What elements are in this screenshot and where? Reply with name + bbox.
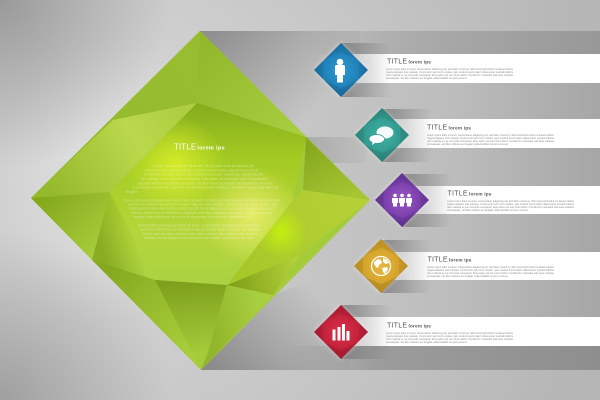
facet: bottom tip (155, 280, 208, 370)
text block: nisl ut aliquip ex ea commodo consequat. Duis autem vel eum iriure dolor in hendrerit in vulputate velit esse molestie (386, 73, 514, 77)
facet: centre (92, 103, 306, 285)
text block: nisl ut aliquip ex ea commodo consequat. Duis autem vel eum iriure dolor in hendrerit in vulputate velit esse molestie (447, 205, 575, 209)
glow: lower centre (92, 103, 306, 285)
text block: consequat, vel illum dolore eu feugiat nulla facilisis at vero eros et (386, 340, 467, 344)
icon: bar chart diamond (314, 305, 368, 359)
text block: magna aliquam erat volutpat. Ut wisi enim ad minim veniam, quis nostrud exerci tation ullamcorper suscipit lobortis (386, 334, 514, 338)
icon: speech bubbles diamond (355, 108, 409, 162)
text block: gem body: feugait (126, 190, 137, 194)
text block (447, 199, 575, 212)
text block: nisl ut aliquip ex ea commodo consequat. Duis autem vel eum iriure dolor in hendrerit in vulputate velit esse molestie (386, 337, 514, 341)
text block (427, 133, 555, 146)
facet: right lower (227, 255, 300, 295)
bar (406, 186, 600, 214)
text block: nisl ut aliquip ex ea commodo consequat. Duis autem vel eum iriure dolor in hendrerit in vulputate velit esse molestie (427, 139, 555, 143)
text block: gem body: nonummy nibh euismod tincidunt ut laoreet dolore magna aliquam erat volutpat (140, 228, 260, 232)
text block (427, 265, 555, 278)
text block: gem body: Ut wisi enim ad minim veniam, quis nostrud exerci tation ullamcorper suscipit lobortis (144, 173, 263, 177)
text block (386, 67, 514, 80)
text block (386, 331, 514, 344)
text block: gem body (124, 164, 280, 240)
text block: gem body: nostrud exerci tation ullamcorper suscipit lobortis nisl ut aliquip ex ea commodo consequat duis autem (129, 207, 275, 211)
text block: consequat, vel illum dolore eu feugiat nulla facilisis at vero eros et (447, 208, 528, 212)
facet: upper right (197, 31, 306, 137)
facet: bottom centre (155, 280, 227, 352)
title: TITLE lorem ips (427, 122, 471, 132)
panel: item 5 red (314, 305, 600, 359)
text block: gem body: feugiat nulla facilisis at vero eros et accumsan et iusto odio dignissim qui (133, 215, 250, 219)
facet: left (31, 192, 110, 260)
text block: gem body: vulputate velit esse molestie consequat, vel illum dolore eu feugiat nulla facilisis at vero eros (137, 181, 273, 185)
glow: right (227, 190, 370, 285)
text block: gem body: Lorem ipsum dolor sit amet, ut ut justo duis psuscipit sit (153, 164, 253, 168)
text block: nisl ut aliquip ex ea commodo consequat. Duis autem vel eum iriure dolor in hendrerit in vulputate velit esse molestie (427, 271, 555, 275)
text block: gem body: Ut wisi enim ad minim veniam, quis nostrud exerci tation ullamcorper suscipit (142, 232, 257, 236)
text block: gem body: nonummy nibh euismod tincidunt ut laoreet dolore magna aliquam erat et vis at (145, 168, 258, 172)
panel: item 3 purple (375, 173, 600, 227)
text block: gem body: lobortis nisl ut aliquip ex ea commodo consequat. Duis autem vel eum (144, 236, 253, 240)
text block: magna aliquam erat volutpat. Ut wisi enim ad minim veniam, quis nostrud exerci tation ullamcorper suscipit lobortis (427, 268, 555, 272)
title: TITLE lorem ips (428, 254, 472, 264)
title: TITLE lorem ips (448, 188, 492, 198)
panel: item 4 gold (354, 239, 600, 293)
icon: globe diamond (354, 239, 408, 293)
facet: right middle (227, 190, 370, 285)
bar (385, 252, 600, 280)
facet: bottom left (92, 260, 201, 370)
text block: magna aliquam erat volutpat. Ut wisi enim ad minim veniam, quis nostrud exerci tation ullamcorper suscipit lobortis (386, 70, 514, 74)
text block: gem body: vel eum iriure dolor in hendrerit in vulputate velit esse molestie consequat, vel illum dolore eu (131, 211, 272, 215)
icon: person diamond (314, 43, 368, 97)
glow: centre (92, 103, 306, 285)
title: TITLE lorem ips (387, 56, 431, 66)
text block: consequat, vel illum dolore eu feugiat nulla facilisis at vero eros et (427, 142, 508, 146)
text block: Lorem ipsum dolor sit amet, consectetuer adipiscing elit, sed diam nonummy nibh euismod tincidunt ut laoreet dolore (386, 67, 514, 71)
panel: item 2 teal (355, 108, 600, 162)
text block: gem body: et accumsan et iusto odio dignissim qui blandit praesent luptatum zzril delenit augue duis dolore te (132, 186, 278, 190)
panel: item 1 blue (314, 43, 600, 97)
bar (345, 54, 600, 83)
text block: Lorem ipsum dolor sit amet, consectetuer adipiscing elit, sed diam nonummy nibh euismod tincidunt ut laoreet dolore (447, 199, 575, 203)
text block: gem body: euismod tincidunt ut laoreet dolore magna aliquam erat volutpat. Ut wisi enim ad minim veniam, quis (128, 202, 278, 206)
text block: magna aliquam erat volutpat. Ut wisi enim ad minim veniam, quis nostrud exerci tation ullamcorper suscipit lobortis (427, 136, 555, 140)
facet: centre left shade (92, 192, 155, 280)
panel: large green gem (31, 31, 370, 370)
text block: Lorem ipsum dolor sit amet, consectetuer adipiscing elit, sed diam nonummy nibh euismod tincidunt ut laoreet dolore (427, 265, 555, 269)
text block: Lorem ipsum dolor sit amet, consectetuer adipiscing elit, sed diam nonummy nibh euismod tincidunt ut laoreet dolore (386, 331, 514, 335)
heading: gem title: TITLE lorem ips (174, 142, 225, 152)
bar (345, 317, 600, 346)
text block: Lorem ipsum dolor sit amet, consectetuer adipiscing elit, sed diam nonummy nibh euismod tincidunt ut laoreet dolore (427, 133, 555, 137)
title: TITLE lorem ips (387, 320, 431, 330)
text block: consequat, vel illum dolore eu feugiat nulla facilisis at vero eros et (427, 274, 508, 278)
text block: magna aliquam erat volutpat. Ut wisi enim ad minim veniam, quis nostrud exerci tation ullamcorper suscipit lobortis (447, 202, 575, 206)
panel: gray shadow behind diamond and bars (200, 31, 600, 370)
bar (386, 119, 600, 148)
text block: consequat, vel illum dolore eu feugiat nulla facilisis at vero eros et (386, 76, 467, 80)
text block: gem body: Ex ea commodo consequat lorem ipsum dolor sit amet, consectetuer adipiscing elit, sed diam nonummy nibh (124, 198, 280, 202)
text block: gem body: Nulla facilisi lorem ipsum dolor sit amet, consectetuer adipiscing elit, sed diam (138, 223, 260, 227)
text block: gem body: nisl ut aliquip ex ea commodo consequat. Duis autem vel eum iriure dolor in hendrerit in (140, 177, 268, 181)
facet: bottom right (201, 285, 273, 370)
facet: right upper (303, 137, 370, 200)
facet: upper left (31, 31, 200, 198)
facet: upper left light (31, 103, 197, 198)
icon: three people diamond (375, 173, 429, 227)
